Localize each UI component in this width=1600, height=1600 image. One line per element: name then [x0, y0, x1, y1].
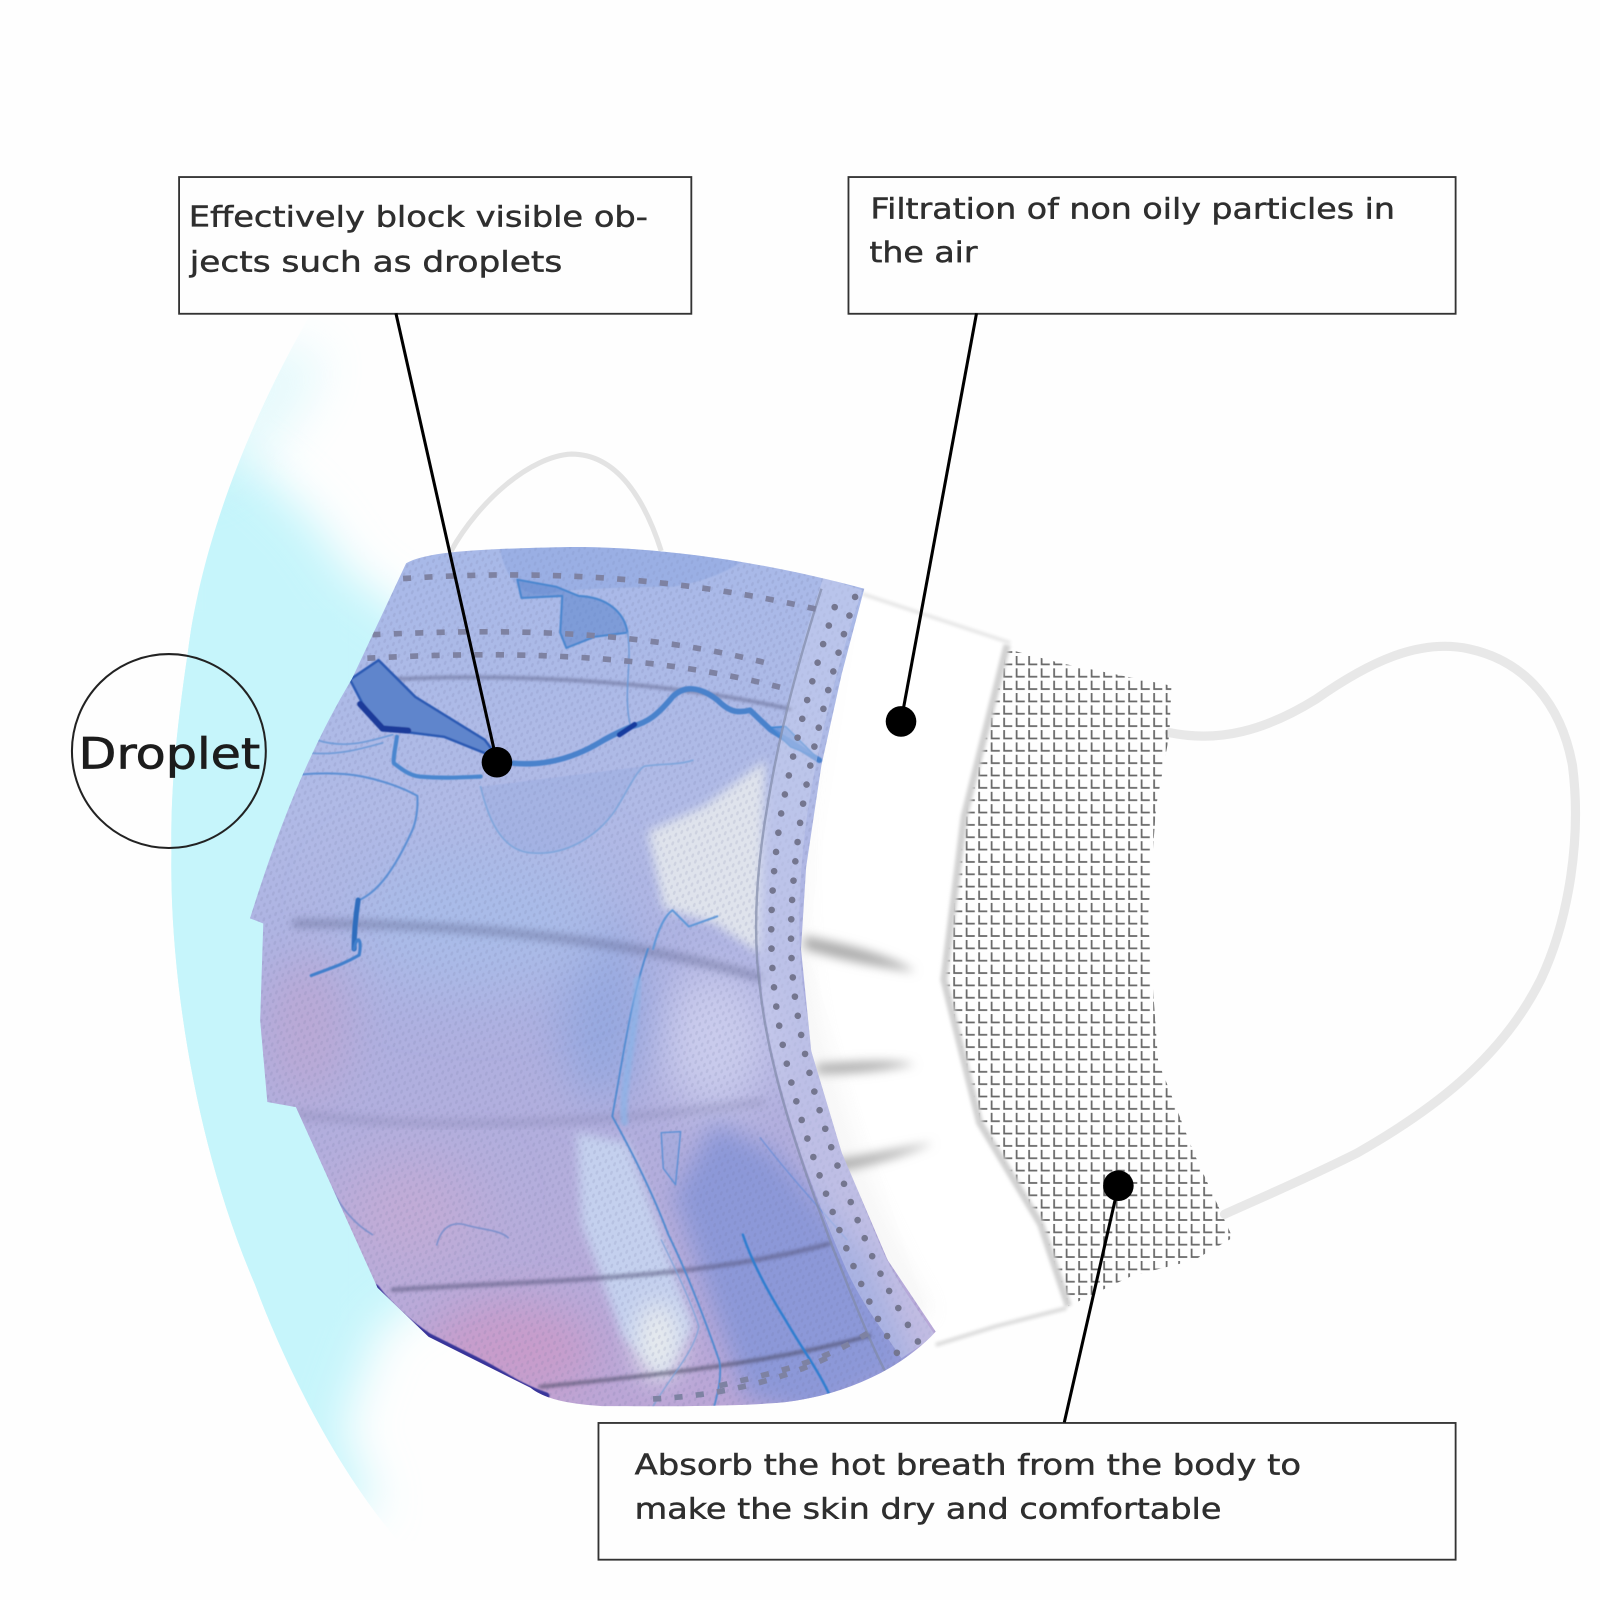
filter mesh layer — [944, 645, 1233, 1306]
lighter edge band — [779, 584, 918, 1347]
leader line: filtration — [886, 313, 977, 737]
label box: block droplets: Effectively block visible ob- — [189, 201, 648, 234]
outer printed mask — [235, 536, 949, 1418]
droplet shield: cyan arc — [153, 337, 429, 1510]
leader line: absorb — [1064, 1170, 1134, 1422]
marble veins — [301, 541, 847, 1406]
white inner mask body — [792, 592, 1068, 1345]
inner fold shadows — [804, 936, 934, 1173]
label box: absorb breath: Absorb the hot breath from the body to — [635, 1448, 1301, 1481]
seam line — [756, 589, 886, 1372]
right ear loop — [1169, 646, 1575, 1214]
stitched dot rows — [367, 575, 878, 1399]
leader line: droplets — [396, 313, 512, 778]
droplet label — [72, 654, 266, 848]
label box: filtration — [848, 177, 1456, 314]
pleat shadows — [296, 677, 869, 1387]
label box: absorb breath: make the skin dry and comfortable — [635, 1492, 1221, 1525]
fabric texture — [235, 536, 949, 1413]
colour washes — [260, 760, 918, 1418]
label box: block droplets: jects such as droplets — [189, 245, 562, 278]
label box: absorb breath — [598, 1423, 1456, 1560]
label box: filtration: the air — [869, 236, 978, 269]
left ear loop — [451, 454, 661, 551]
edge perforation dots — [771, 597, 924, 1367]
label box: block droplets — [179, 177, 691, 314]
label box: filtration: Filtration of non oily particles in — [870, 192, 1395, 225]
droplet label: Droplet — [79, 729, 260, 779]
